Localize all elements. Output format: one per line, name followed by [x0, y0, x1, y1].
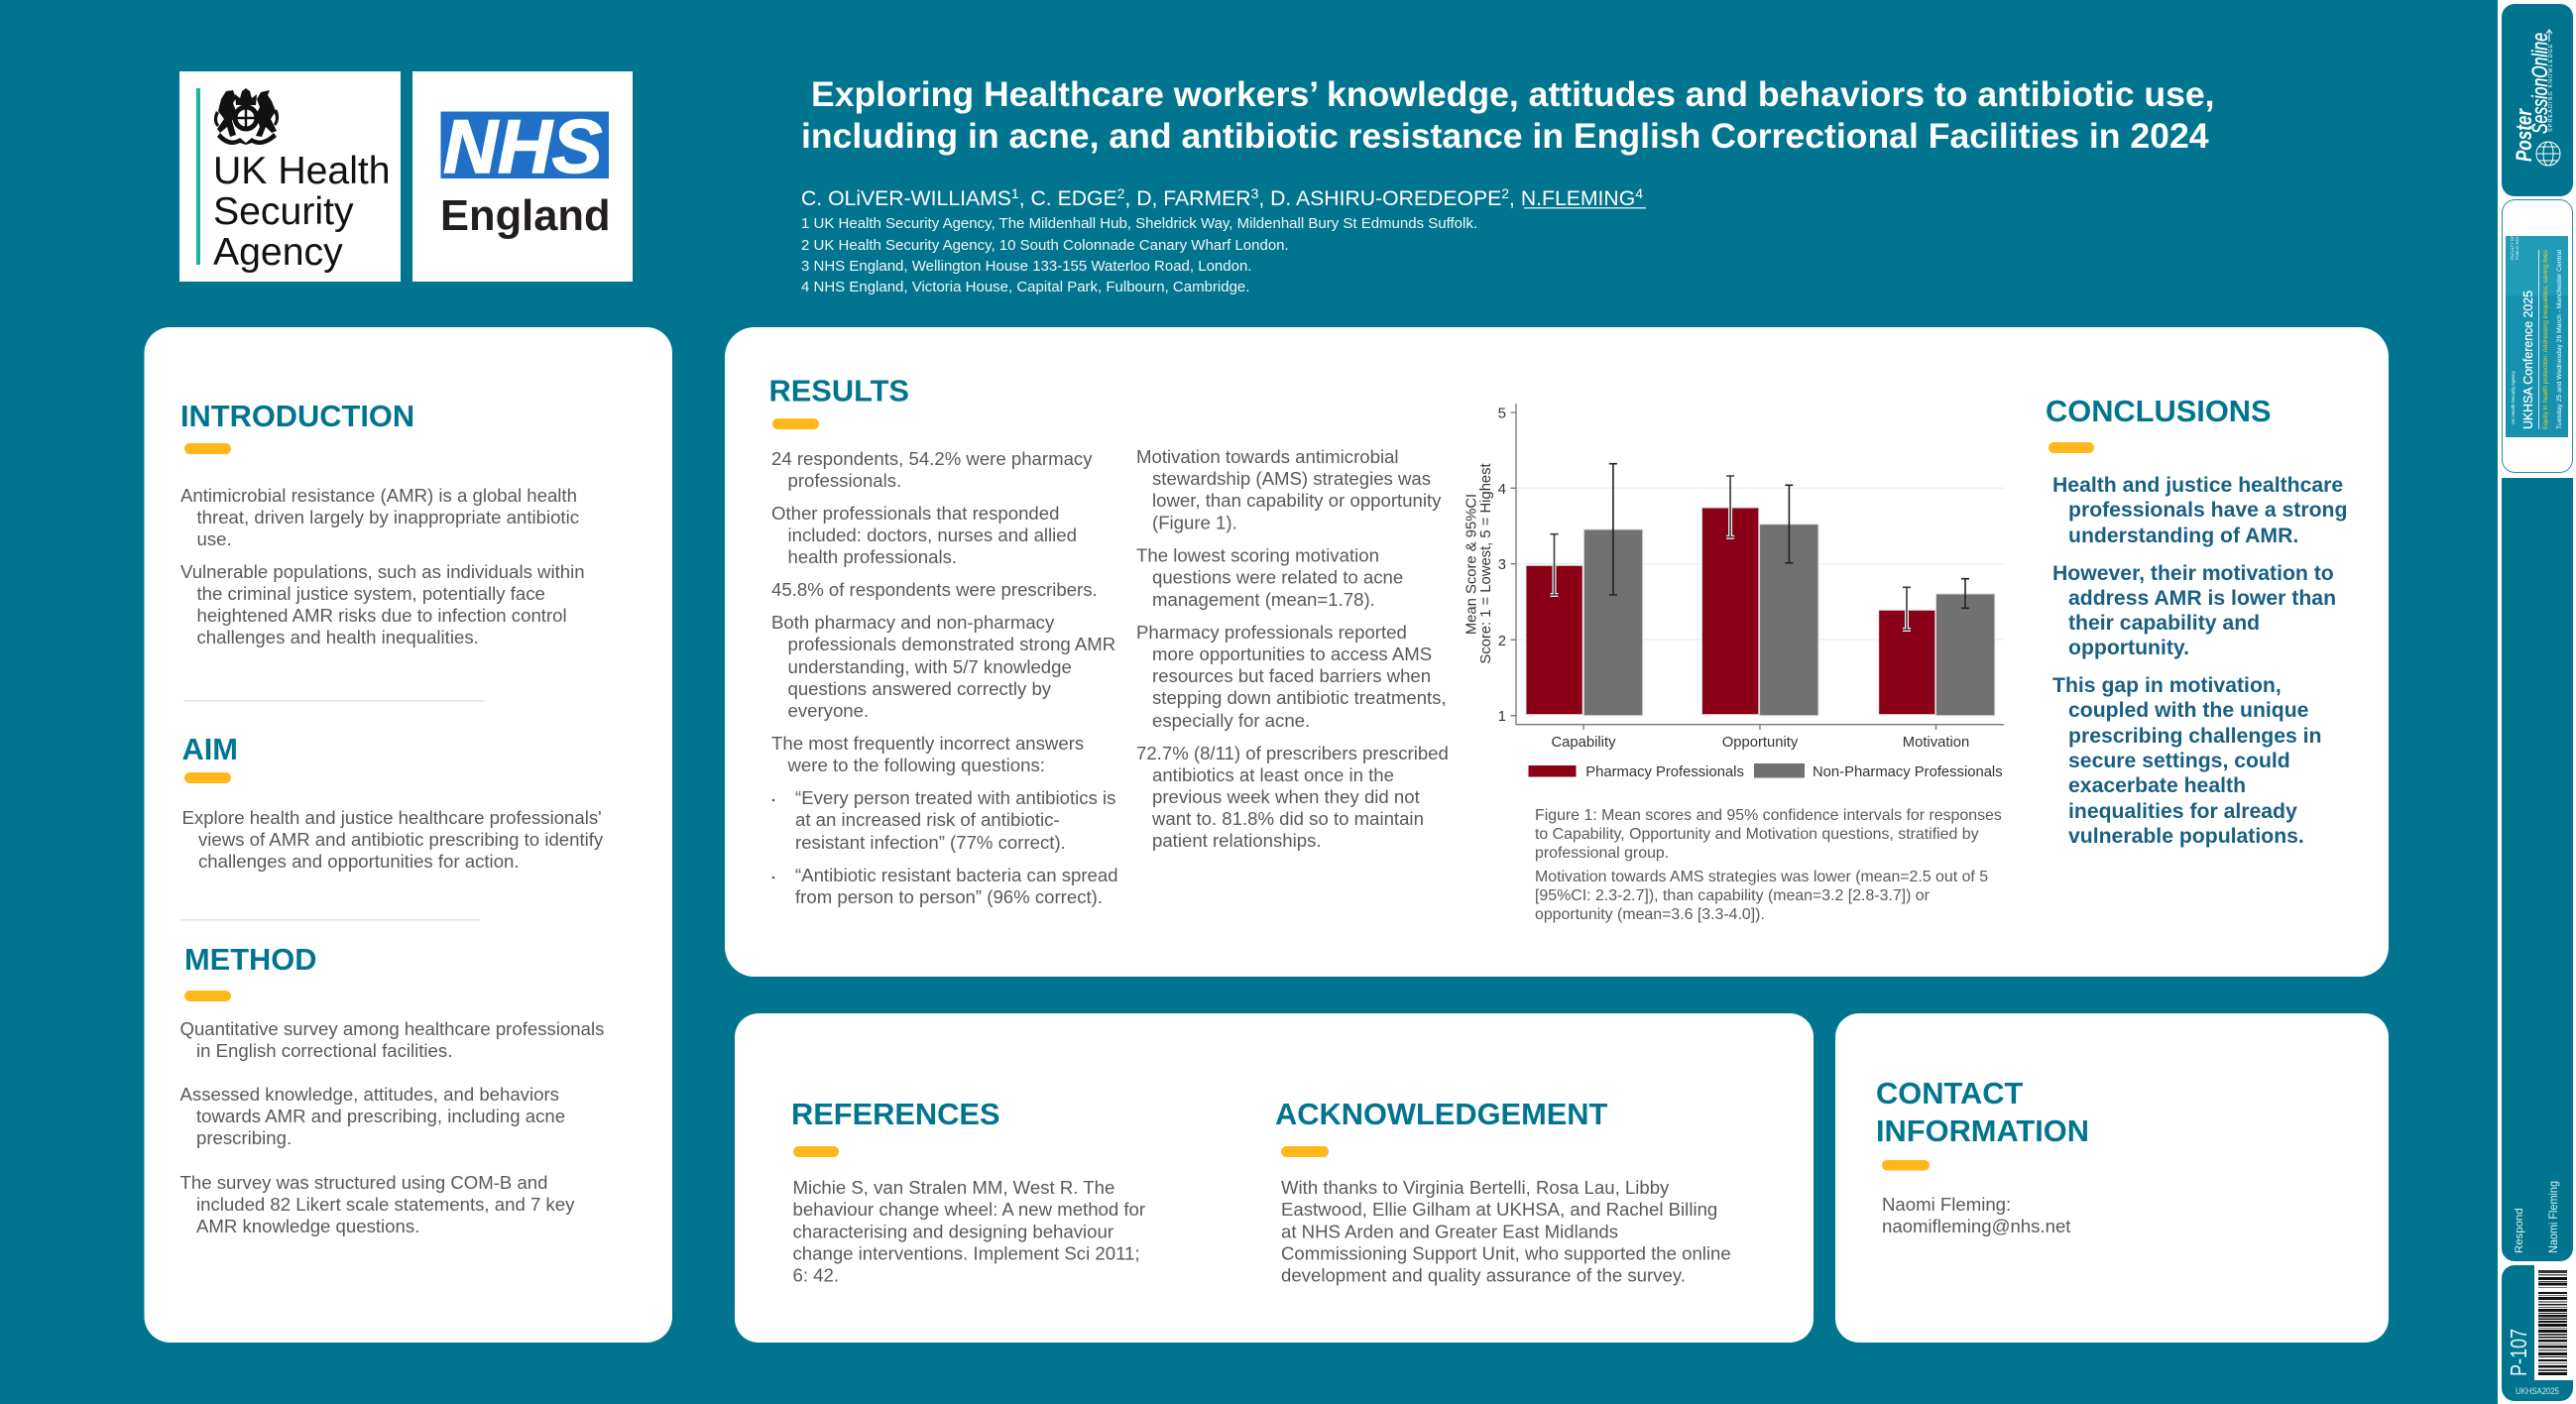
- authors: 1: [1011, 185, 1019, 201]
- accent bar: acknowledgement: [1281, 1146, 1329, 1157]
- text: contact details: [1882, 1194, 2071, 1236]
- logo: NHS England: NHS: [443, 105, 602, 189]
- text: method: [180, 1018, 604, 1236]
- text: results column 1: Other professionals that responded: [771, 503, 1059, 524]
- text: results column 1: understanding, with 5/7 knowledge: [787, 656, 1072, 677]
- text: results column 2: Pharmacy professionals reported: [1136, 622, 1407, 643]
- heading: introduction: INTRODUCTION: [180, 399, 414, 433]
- accent bar: aim: [184, 772, 231, 783]
- logo wordmark: Agency: [213, 231, 343, 274]
- text: introduction: the criminal justice system, potentially face: [196, 583, 545, 604]
- logo wordmark: [213, 150, 391, 274]
- bar chart: mean scores by COM-B domain: [1464, 404, 2004, 780]
- sidebar logo: Poster Session Online: SPREADING KNOWLEDGE: [2548, 43, 2554, 132]
- y axis: 4: [1498, 482, 1506, 498]
- authors: 2: [1117, 185, 1125, 201]
- text: results column 2: (Figure 1).: [1152, 512, 1237, 533]
- text: results column 2: questions were related to acne: [1152, 567, 1403, 587]
- affiliations: [801, 215, 1477, 295]
- text: conclusions: This gap in motivation,: [2052, 674, 2282, 697]
- text: results column 1: were to the following questions:: [787, 755, 1045, 775]
- accent bar: contact: [1882, 1160, 1930, 1170]
- x axis: Motivation: [1903, 735, 1969, 751]
- text: results column 2: management (mean=1.78).: [1152, 589, 1375, 610]
- text: references: [793, 1177, 1145, 1285]
- text: conclusions: address AMR is lower than: [2068, 587, 2336, 610]
- text: method: prescribing.: [196, 1127, 292, 1148]
- text: conclusions: understanding of AMR.: [2068, 525, 2298, 547]
- text: conclusions: Health and justice healthcare: [2052, 474, 2343, 497]
- y axis: [1498, 404, 1516, 725]
- text: results column 1: everyone.: [787, 700, 869, 721]
- text: introduction: use.: [196, 528, 232, 549]
- logo: NHS England: [412, 71, 633, 282]
- text: results column 2: The lowest scoring motivation: [1136, 545, 1379, 565]
- text: results column 2: antibiotics at least once in the: [1152, 764, 1394, 785]
- text: results column 1: included: doctors, nurses and allied: [787, 525, 1077, 545]
- text: acknowledgement: [1281, 1177, 1731, 1285]
- text: method: Assessed knowledge, attitudes, and behaviors: [180, 1084, 559, 1105]
- bars: capability: [1526, 529, 1643, 716]
- y axis: 1: [1498, 709, 1506, 725]
- text: results column 2: lower, than capability or opportunity: [1152, 490, 1442, 511]
- figure caption: to Capability, Opportunity and Motivation questions, stratified by: [1535, 826, 1979, 843]
- text: conclusions: However, their motivation to: [2052, 562, 2334, 585]
- authors: , N.FLEMING: [1509, 187, 1635, 210]
- text: aim: views of AMR and antibiotic prescribing to identify: [198, 829, 604, 850]
- text: acknowledgement: With thanks to Virginia Bertelli, Rosa Lau, Libby: [1281, 1177, 1670, 1198]
- panel: introduction, aim and method: [145, 327, 672, 1343]
- y axis: 5: [1498, 407, 1506, 422]
- figure caption: professional group.: [1535, 845, 1669, 862]
- sidebar: presenter tab: Naomi Fleming: [2546, 1181, 2560, 1253]
- heading: contact information: CONTACT: [1876, 1076, 2023, 1111]
- sidebar: poster session: [2498, 0, 2576, 1404]
- text: method: AMR knowledge questions.: [196, 1216, 419, 1236]
- heading: results: RESULTS: [769, 373, 909, 409]
- heading: conclusions: CONCLUSIONS: [2046, 394, 2272, 428]
- text: results column 1: questions answered correctly by: [787, 678, 1052, 699]
- text: introduction: heightened AMR risks due to infection control: [196, 605, 567, 626]
- error bars: [1551, 464, 1969, 630]
- text: results column 1: 24 respondents, 54.2% were pharmacy: [771, 448, 1093, 469]
- accent bar: results: [772, 418, 819, 429]
- text: results column 1: from person to person” (96% correct).: [795, 886, 1103, 907]
- x axis: Opportunity: [1722, 735, 1799, 751]
- authors: 3: [1251, 185, 1259, 201]
- panel: results and conclusions: [725, 327, 2389, 977]
- y axis: 3: [1498, 557, 1506, 573]
- text: introduction: Antimicrobial resistance (AMR) is a global health: [180, 485, 577, 506]
- text: method: included 82 Likert scale statements, and 7 key: [196, 1194, 575, 1215]
- logo wordmark: Security: [213, 190, 354, 233]
- text: results column 1: Both pharmacy and non-pharmacy: [771, 612, 1055, 633]
- text: results column 1: at an increased risk of antibiotic-: [795, 809, 1060, 830]
- logo wordmark: UK Health: [213, 150, 391, 192]
- text: conclusions: their capability and: [2068, 612, 2260, 635]
- sidebar: UKHSA conference banner: PUBLIC HEALTH: [2515, 229, 2519, 260]
- logo: NHS England: England: [440, 192, 611, 240]
- text: conclusions: vulnerable populations.: [2068, 825, 2304, 848]
- text: acknowledgement: development and quality assurance of the survey.: [1281, 1265, 1686, 1285]
- text: results column 2: 72.7% (8/11) of prescribers prescribed: [1136, 743, 1449, 763]
- text: results column 1: resistant infection” (77% correct).: [795, 832, 1066, 853]
- text: aim: Explore health and justice healthcare professionals': [182, 807, 602, 828]
- affiliations: 3 NHS England, Wellington House 133-155 Waterloo Road, London.: [801, 258, 1251, 275]
- sidebar: presenter tab: [2502, 478, 2573, 1261]
- text: results column 2: resources but faced barriers when: [1152, 665, 1431, 686]
- x axis: [1516, 725, 2004, 751]
- text: acknowledgement: Eastwood, Ellie Gilham at UKHSA, and Rachel Billing: [1281, 1199, 1717, 1220]
- sidebar: UKHSA conference banner: [2503, 200, 2572, 472]
- conference code: UKHSA2025: [2516, 1386, 2559, 1396]
- text: results column 1: 45.8% of respondents were prescribers.: [771, 579, 1098, 600]
- authors: C. OLiVER-WILLIAMS: [801, 187, 1011, 210]
- text: method: Quantitative survey among healthcare professionals: [180, 1018, 604, 1039]
- authors: , C. EDGE: [1019, 187, 1117, 210]
- y axis title: [1464, 463, 1494, 664]
- affiliations: 1 UK Health Security Agency, The Mildenhall Hub, Sheldrick Way, Mildenhall Bury St Edmunds Suffolk.: [801, 215, 1477, 232]
- text: conclusions: prescribing challenges in: [2068, 725, 2322, 748]
- title: Exploring Healthcare workers’ knowledge, attitudes and behaviors to antibiotic use,: [811, 74, 2215, 114]
- text: conclusions: opportunity.: [2068, 637, 2189, 659]
- heading: contact information: [1876, 1076, 2089, 1148]
- affiliations: 2 UK Health Security Agency, 10 South Colonnade Canary Wharf London.: [801, 237, 1289, 254]
- sidebar: UKHSA conference banner: Equity in health protection: Addressing inequalities, saving lives: [2542, 250, 2549, 429]
- text: contact details: Naomi Fleming:: [1882, 1194, 2011, 1215]
- text: aim: [182, 807, 604, 872]
- affiliations: 4 NHS England, Victoria House, Capital Park, Fulbourn, Cambridge.: [801, 279, 1249, 295]
- text: method: in English correctional facilities.: [196, 1040, 452, 1061]
- accent bar: method: [184, 991, 231, 1001]
- title: including in acne, and antibiotic resistance in English Correctional Facilities in 2024: [801, 116, 2209, 156]
- text: conclusions: [2052, 474, 2347, 848]
- sidebar logo: Poster Session Online: Poster: [2512, 108, 2536, 162]
- panel: contact information: [1835, 1013, 2389, 1343]
- text: results column 1: “Antibiotic resistant bacteria can spread: [795, 865, 1118, 885]
- figure caption: [95%CI: 2.3-2.7]), than capability (mean=3.2 [2.8-3.7]) or: [1535, 887, 1931, 904]
- text: conclusions: coupled with the unique: [2068, 699, 2309, 722]
- text: results column 1: health professionals.: [787, 546, 957, 567]
- bars: opportunity: [1701, 508, 1818, 716]
- text: results column 2: [1136, 446, 1449, 851]
- sidebar: UKHSA conference banner: UK Health Security Agency: [2511, 370, 2516, 424]
- text: results column 2: especially for acne.: [1152, 710, 1310, 731]
- text: conclusions: exacerbate health: [2068, 774, 2246, 797]
- sidebar: UKHSA conference banner: FACULTY OF: [2510, 235, 2515, 260]
- authors: 2: [1501, 185, 1509, 201]
- accent bar: references: [793, 1146, 839, 1157]
- legend: [1529, 763, 2003, 780]
- authors: 4: [1635, 185, 1643, 201]
- text: conclusions: secure settings, could: [2068, 750, 2290, 772]
- text: conclusions: inequalities for already: [2068, 800, 2297, 823]
- text: aim: challenges and opportunities for action.: [198, 851, 520, 872]
- panel: references and acknowledgement: [735, 1013, 1814, 1343]
- text: results column 2: want to. 81.8% did so to maintain: [1151, 808, 1424, 829]
- y axis title: Mean Score & 95%CI: [1464, 494, 1479, 635]
- figure caption: Figure 1: Mean scores and 95% confidence intervals for responses: [1535, 807, 2002, 824]
- heading: contact information: INFORMATION: [1876, 1113, 2089, 1148]
- heading: references: REFERENCES: [791, 1097, 999, 1131]
- sidebar logo: Poster Session Online: [2502, 4, 2573, 196]
- logo: UK Health Security Agency: [179, 71, 401, 282]
- authors: , D, FARMER: [1124, 187, 1251, 210]
- sidebar: UKHSA conference banner: UKHSA Conference 2025: [2521, 291, 2535, 429]
- text: results column 1: professionals.: [787, 470, 901, 491]
- text: acknowledgement: at NHS Arden and Greater East Midlands: [1281, 1222, 1618, 1241]
- text: results column 2: stepping down antibiotic treatments,: [1152, 687, 1447, 708]
- accent bar: conclusions: [2049, 442, 2094, 453]
- text: method: towards AMR and prescribing, including acne: [196, 1106, 565, 1126]
- sidebar: presenter tab: Respond: [2514, 1208, 2525, 1253]
- text: results column 2: patient relationships.: [1152, 830, 1322, 851]
- text: references: Michie S, van Stralen MM, West R. The: [793, 1177, 1114, 1198]
- text: contact details: naomifleming@nhs.net: [1882, 1216, 2071, 1236]
- text: results column 1: [771, 448, 1118, 907]
- authors: [801, 185, 1646, 210]
- text: introduction: threat, driven largely by inappropriate antibiotic: [196, 507, 579, 527]
- text: references: behaviour change wheel: A new method for: [793, 1199, 1145, 1220]
- text: references: change interventions. Implement Sci 2011;: [793, 1243, 1140, 1263]
- title: [801, 74, 2215, 156]
- poster number: P-107: [2506, 1329, 2531, 1376]
- figure caption: opportunity (mean=3.6 [3.3-4.0]).: [1535, 906, 1765, 923]
- authors: , D. ASHIRU-OREDEOPE: [1258, 187, 1501, 210]
- text: results column 2: Motivation towards antimicrobial: [1136, 446, 1399, 467]
- text: results column 2: more opportunities to access AMS: [1152, 644, 1432, 664]
- text: results column 1: The most frequently incorrect answers: [771, 733, 1084, 754]
- sidebar: poster id and barcode: [2502, 1265, 2573, 1401]
- text: method: The survey was structured using COM-B and: [180, 1172, 547, 1193]
- sidebar: UKHSA conference banner: Tuesday 25 and Wednesday 26 March - Manchester Central: [2556, 249, 2563, 429]
- bars: motivation: [1879, 594, 1995, 716]
- text: conclusions: professionals have a strong: [2068, 499, 2347, 522]
- text: results column 2: previous week when they did not: [1152, 786, 1421, 807]
- figure caption: [1535, 807, 2002, 923]
- text: acknowledgement: Commissioning Support Unit, who supported the online: [1281, 1243, 1731, 1263]
- legend: Pharmacy Professionals: [1585, 764, 1744, 780]
- heading: aim: AIM: [182, 732, 238, 766]
- text: introduction: Vulnerable populations, such as individuals within: [180, 561, 585, 582]
- x axis: Capability: [1552, 735, 1616, 751]
- heading: method: METHOD: [184, 942, 316, 977]
- y axis title: Score: 1 = Lowest, 5 = Highest: [1478, 463, 1494, 664]
- text: introduction: challenges and health inequalities.: [196, 627, 479, 647]
- text: references: 6: 42.: [793, 1265, 839, 1285]
- text: references: characterising and designing behaviour: [793, 1222, 1113, 1241]
- barcode: [2538, 1270, 2567, 1375]
- text: results column 1: “Every person treated with antibiotics is: [795, 787, 1115, 808]
- text: results column 1: professionals demonstrated strong AMR: [787, 634, 1115, 654]
- legend: Non-Pharmacy Professionals: [1813, 764, 2003, 780]
- text: introduction: [180, 485, 585, 647]
- heading: acknowledgement: ACKNOWLEDGEMENT: [1275, 1097, 1608, 1131]
- figure caption: Motivation towards AMS strategies was lower (mean=2.5 out of 5: [1535, 869, 1988, 885]
- icon: royal crest: [214, 88, 279, 145]
- y axis: 2: [1498, 634, 1506, 649]
- text: results column 2: stewardship (AMS) strategies was: [1152, 468, 1431, 489]
- accent bar: introduction: [184, 443, 231, 454]
